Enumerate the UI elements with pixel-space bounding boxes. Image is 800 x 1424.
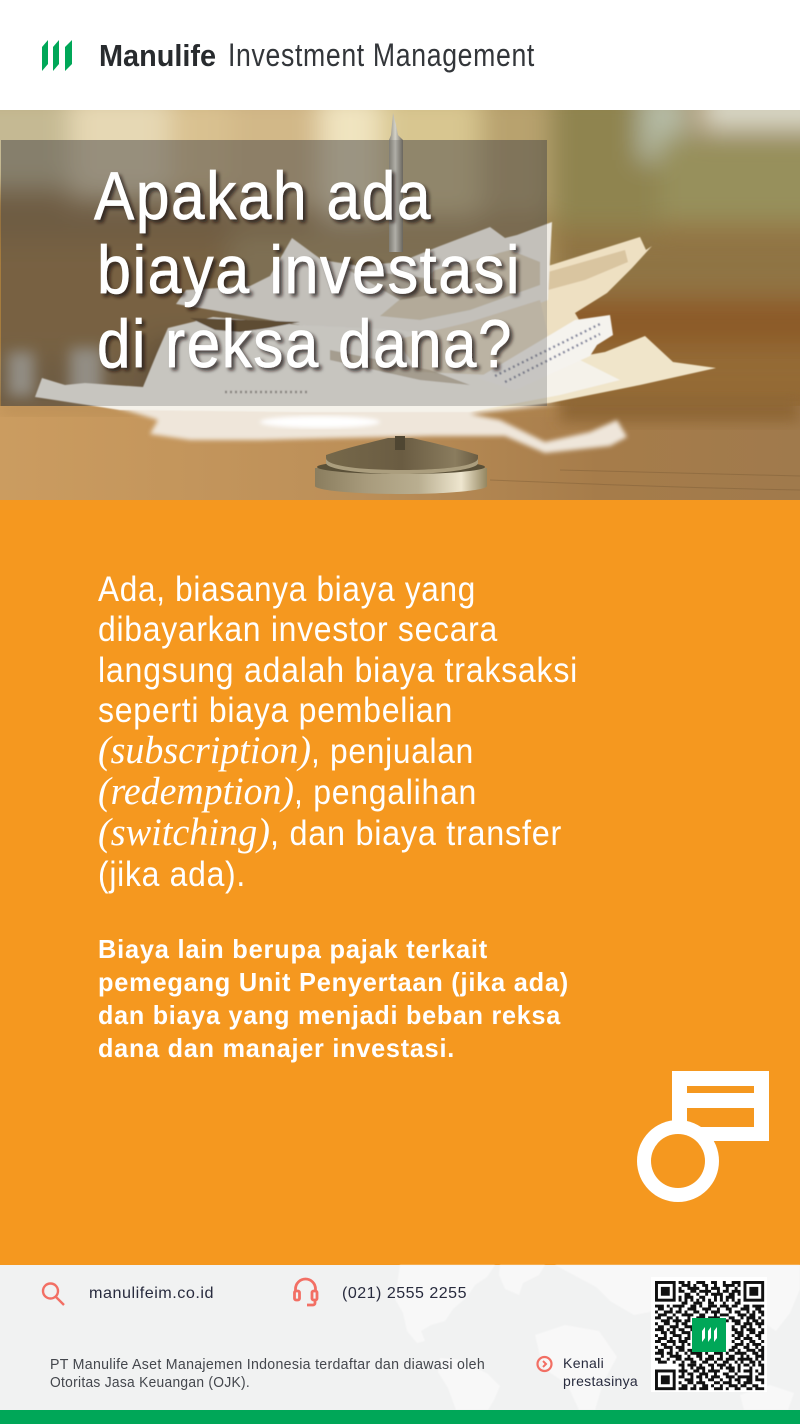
QR code [651,1277,767,1392]
phone number: (021) 2555 2255 [342,1285,467,1302]
secondary bold paragraph: dan biaya yang menjadi beban reksa [98,1000,561,1030]
title: biaya investasi [97,232,521,308]
hero photo: paper receipts on a spike [0,90,800,500]
receipt strip [484,314,614,376]
icon: document with circle [637,1071,769,1202]
orange content panel [0,500,800,1265]
paper: upper stack [176,222,552,342]
title: Apakah ada [94,158,432,234]
brand descriptor: Investment Management [228,37,535,73]
header band [0,0,800,110]
secondary bold paragraph: dana dan manajer investasi. [98,1033,455,1063]
link text: prestasinya [563,1373,638,1389]
green bottom bar [0,1410,800,1424]
paper: tan fold on right sheet [548,250,628,290]
paper: main sheets [35,317,620,412]
icon: Manulife three green bars [42,40,72,71]
regulatory disclaimer [50,1357,485,1391]
receipt printing [225,324,600,392]
icon: headset [294,1279,317,1305]
body paragraph: (redemption) [98,770,294,813]
paper: tan right interior [395,300,548,375]
metal spike [389,113,403,252]
table top [0,396,800,500]
overlay tint beneath papers [1,140,547,406]
regulatory disclaimer: PT Manulife Aset Manajemen Indonesia terdaftar dan diawasi oleh [50,1357,485,1373]
paper stack [35,222,716,453]
body paragraph: (subscription) [98,729,311,772]
website address: manulifeim.co.id [89,1285,214,1302]
regulatory disclaimer: Otoritas Jasa Keuangan (OJK). [50,1375,250,1391]
paper: right lower cream sheet [470,336,716,412]
link text [563,1355,638,1389]
icon: circled chevron [538,1357,552,1371]
world map watermark [395,1265,800,1410]
body paragraph: , dan biaya transfer [270,814,562,853]
body paragraph: , pengalihan [294,773,477,812]
body paragraph [98,570,578,894]
paper: shadowed folds [330,350,470,385]
paper: tan interior [380,250,540,320]
body paragraph: seperti biaya pembelian [98,691,453,730]
secondary bold paragraph: Biaya lain berupa pajak terkait [98,934,488,964]
secondary bold paragraph: pemegang Unit Penyertaan (jika ada) [98,967,569,997]
link text: Kenali [563,1355,604,1371]
blurred objects left [8,348,102,398]
paper: brown gap [190,318,300,332]
overlay tint above papers [1,140,547,406]
performance link [538,1355,638,1389]
secondary bold paragraph [98,934,569,1063]
body paragraph: dibayarkan investor secara [98,610,498,649]
spike base [315,436,487,494]
paper: bottom blurred sheet [105,404,627,453]
brand name: Manulife [99,38,216,73]
title [94,158,521,382]
paper: bright glare [260,416,380,428]
QR centre logo [692,1318,726,1352]
body paragraph: Ada, biasanya biaya yang [98,570,476,609]
body paragraph: , penjualan [311,732,474,771]
icon: magnifier [43,1284,64,1305]
body paragraph: (jika ada). [98,855,246,894]
contact: phone [294,1279,467,1305]
logo: Manulife Investment Management [42,37,535,73]
body paragraph: langsung adalah biaya traksaksi [98,651,578,690]
paper: right cream sheet [500,234,670,350]
footer band [0,1265,800,1410]
title: di reksa dana? [97,306,513,382]
contact: website [43,1284,214,1305]
body paragraph: (switching) [98,811,270,854]
